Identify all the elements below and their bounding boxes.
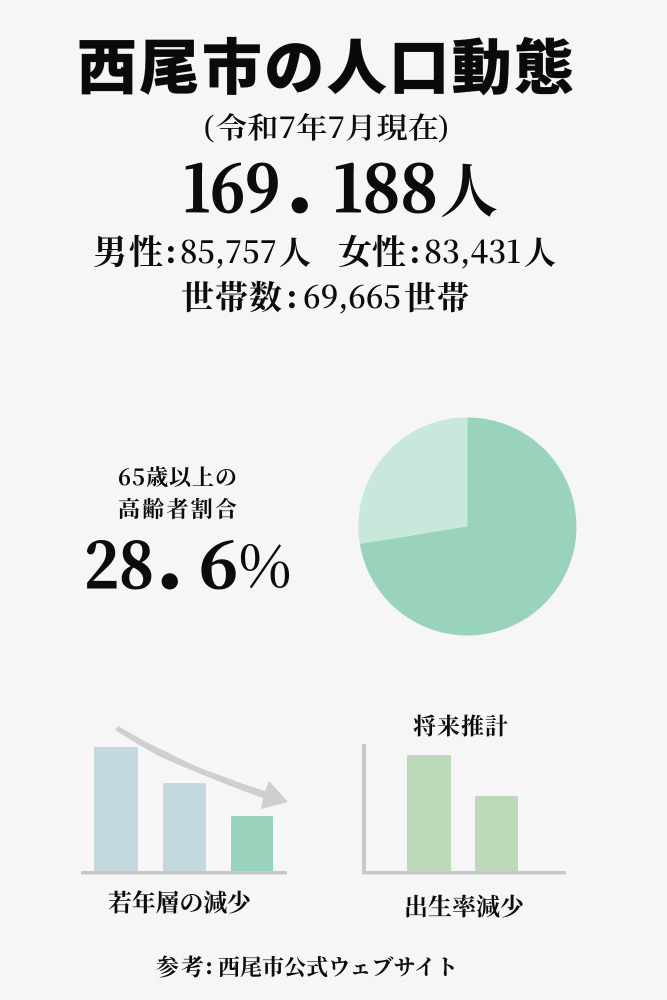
elderly ratio value: ％ <box>236 520 294 604</box>
pie chart <box>358 418 576 636</box>
female count: 人 <box>524 228 556 274</box>
source note: 西尾市公式ウェブサイト <box>218 951 458 982</box>
total population <box>183 97 498 241</box>
elderly ratio label: 高齢者割合 <box>118 493 237 524</box>
title: 西尾市の人口動態 <box>77 35 574 102</box>
elderly ratio value: 6 <box>199 516 238 607</box>
male count <box>93 225 311 274</box>
projection heading: 将来推計 <box>413 708 508 741</box>
male count: 男性 <box>93 225 163 274</box>
male count: : <box>165 231 177 271</box>
household count: : <box>286 276 298 316</box>
female count: 83,431 <box>424 227 521 272</box>
elderly ratio label: 65歳以上の <box>118 461 237 492</box>
total population: 169 <box>183 137 280 231</box>
date subtitle: 令和7年7月現在 <box>216 106 439 147</box>
elderly ratio value: 28 <box>84 516 154 607</box>
total population: 188 <box>333 137 438 231</box>
bar chart: youth decline <box>81 726 288 874</box>
birth rate label: 出生率減少 <box>404 887 526 922</box>
date subtitle: ) <box>438 108 448 143</box>
youth decline label: 若年層の減少 <box>108 883 253 918</box>
household count: 69,665 <box>303 272 401 317</box>
total population: . <box>283 97 316 241</box>
elderly ratio value <box>84 473 294 617</box>
source note: 参考 <box>156 949 204 982</box>
male count: 85,757 <box>180 227 277 272</box>
elderly ratio value: . <box>153 473 186 617</box>
arrow: downward trend <box>115 726 288 809</box>
female count <box>338 225 556 274</box>
household count <box>181 272 469 319</box>
male and female counts <box>93 225 556 274</box>
household count: 世帯数 <box>181 272 282 319</box>
male count: 人 <box>279 228 311 274</box>
bar chart: birth rate <box>362 744 566 874</box>
source note: : <box>205 953 213 980</box>
total population: 人 <box>440 145 498 229</box>
female count: : <box>409 231 421 271</box>
household count: 世帯 <box>404 273 469 319</box>
elderly ratio label <box>118 461 237 524</box>
female count: 女性 <box>338 225 406 274</box>
date subtitle: ( <box>204 108 214 143</box>
